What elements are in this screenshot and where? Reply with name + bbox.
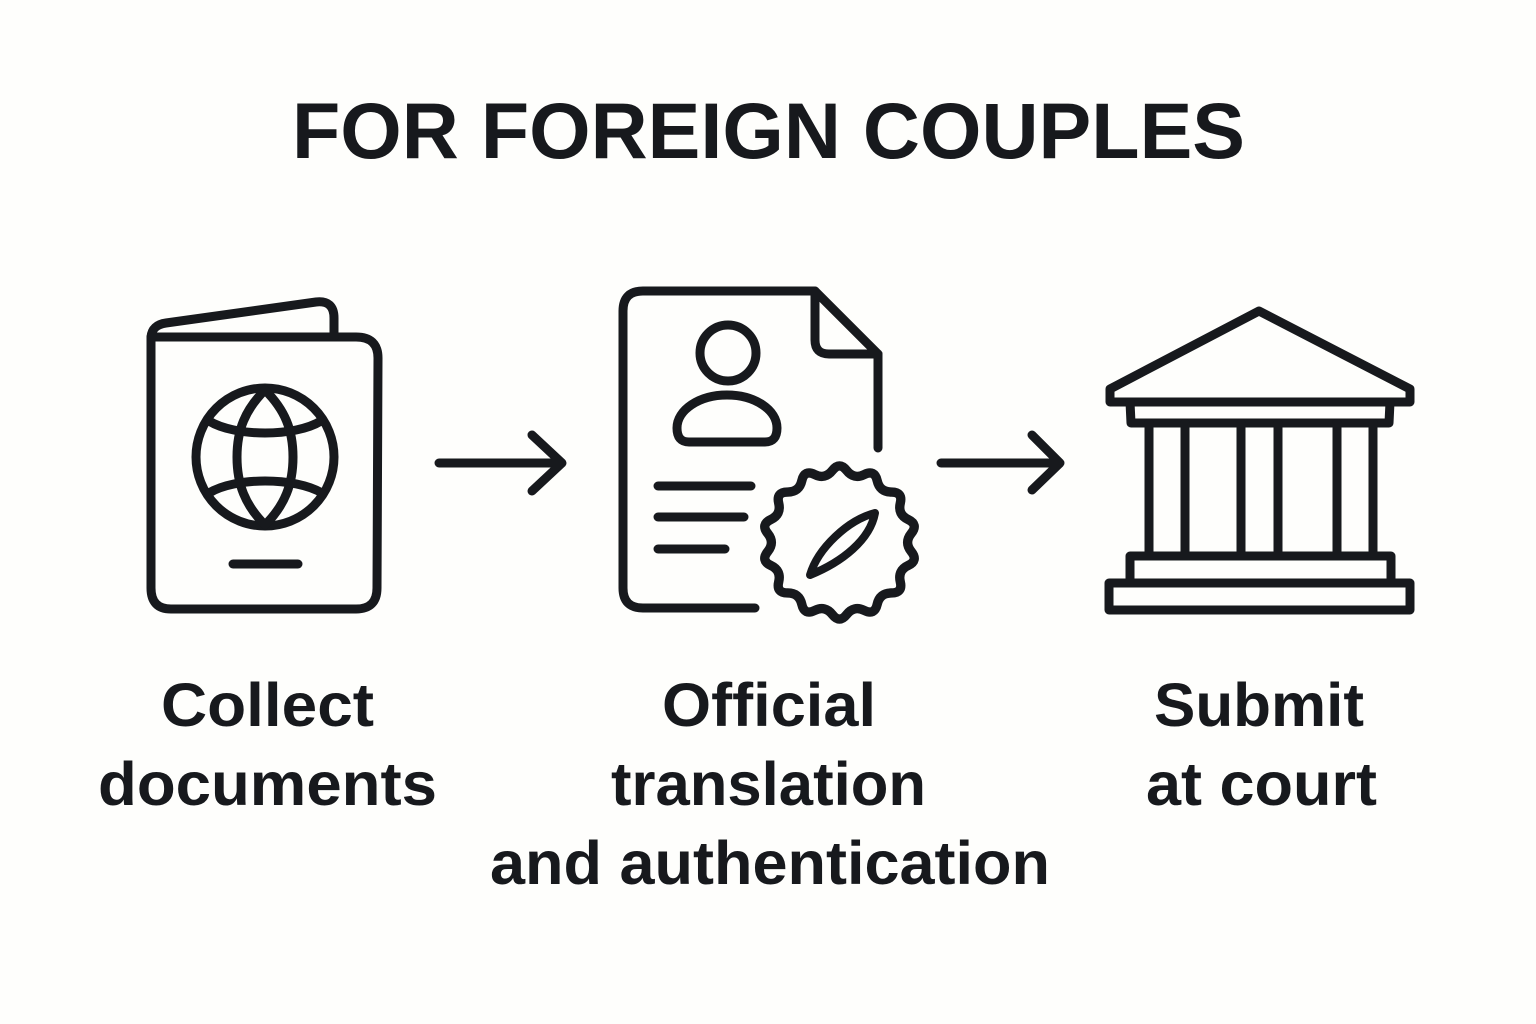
globe bbox=[196, 388, 334, 526]
pediment roof bbox=[1110, 311, 1410, 402]
passport cover bbox=[151, 337, 378, 609]
label: collect documents: Collect bbox=[161, 671, 374, 739]
document outline bbox=[623, 291, 878, 608]
upper step bbox=[1130, 556, 1391, 583]
passport back flap bbox=[151, 302, 334, 337]
label: collect documents: documents bbox=[98, 750, 437, 818]
frieze bbox=[1130, 402, 1390, 423]
arrow: translation to court bbox=[941, 435, 1060, 490]
label: official translation and authentication: translation bbox=[611, 750, 926, 818]
icon: courthouse bbox=[1109, 311, 1410, 610]
arrow: collect to translation bbox=[439, 435, 562, 491]
icon: certified document bbox=[623, 291, 914, 619]
label: submit at court: Submit bbox=[1154, 671, 1364, 739]
lower step bbox=[1109, 583, 1410, 610]
label: official translation and authentication: Official bbox=[662, 671, 876, 739]
label: official translation and authentication: and authentication bbox=[490, 829, 1050, 897]
person head bbox=[700, 325, 756, 381]
seal badge bbox=[765, 466, 914, 619]
label: submit at court bbox=[1146, 671, 1377, 818]
passport name line bbox=[233, 560, 298, 568]
person shoulders bbox=[677, 395, 777, 442]
seal pen nib bbox=[810, 513, 875, 575]
icon: passport with globe bbox=[151, 302, 378, 609]
text lines bbox=[658, 486, 751, 549]
columns bbox=[1149, 423, 1373, 556]
label: official translation and authentication bbox=[490, 671, 1050, 897]
title: FOR FOREIGN COUPLES bbox=[292, 86, 1245, 175]
label: submit at court: at court bbox=[1146, 750, 1377, 818]
label: collect documents bbox=[98, 671, 437, 818]
folded corner bbox=[815, 291, 878, 354]
